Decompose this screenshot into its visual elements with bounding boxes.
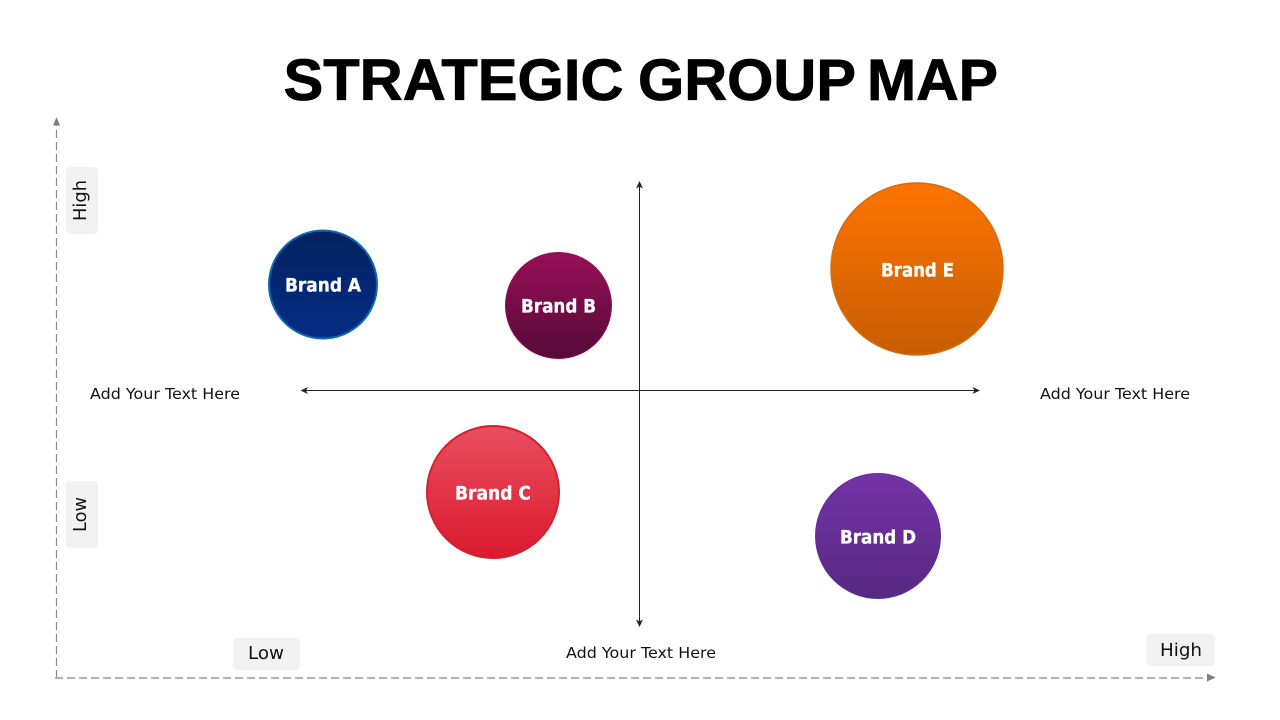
bubble: Brand E (831, 183, 1003, 355)
bubble: Brand B (506, 252, 612, 358)
text: left axis label: Add Your Text Here (90, 385, 240, 403)
title: GROUP (638, 48, 856, 113)
bubble: Brand B: Brand B (521, 296, 596, 318)
label: y axis high (66, 167, 98, 234)
arrow: horizontal outer axis (55, 674, 1216, 682)
bubble: Brand D: Brand D (840, 526, 916, 548)
text: bottom axis label: Add Your Text Here (566, 644, 716, 662)
label: x axis low (233, 638, 300, 670)
label: y axis low (66, 481, 98, 548)
bubble: Brand C (427, 426, 559, 558)
title: STRATEGIC (284, 48, 624, 113)
arrow: inner vertical axis (636, 181, 643, 627)
label: x axis high: High (1160, 640, 1202, 661)
text: right axis label: Add Your Text Here (1040, 385, 1190, 403)
bubble: Brand C: Brand C (455, 482, 531, 504)
label: x axis low: Low (248, 643, 284, 664)
bubble: Brand A (269, 230, 377, 338)
bubble: Brand E: Brand E (881, 260, 954, 282)
title: MAP (867, 48, 998, 113)
arrow: inner horizontal axis (300, 387, 980, 394)
label: y axis low: Low (70, 497, 91, 532)
label: y axis high: High (70, 180, 91, 221)
arrow: vertical outer axis (53, 117, 60, 678)
label: x axis high (1147, 634, 1215, 666)
bubble: Brand D (816, 474, 940, 598)
bubble: Brand A: Brand A (285, 274, 361, 296)
